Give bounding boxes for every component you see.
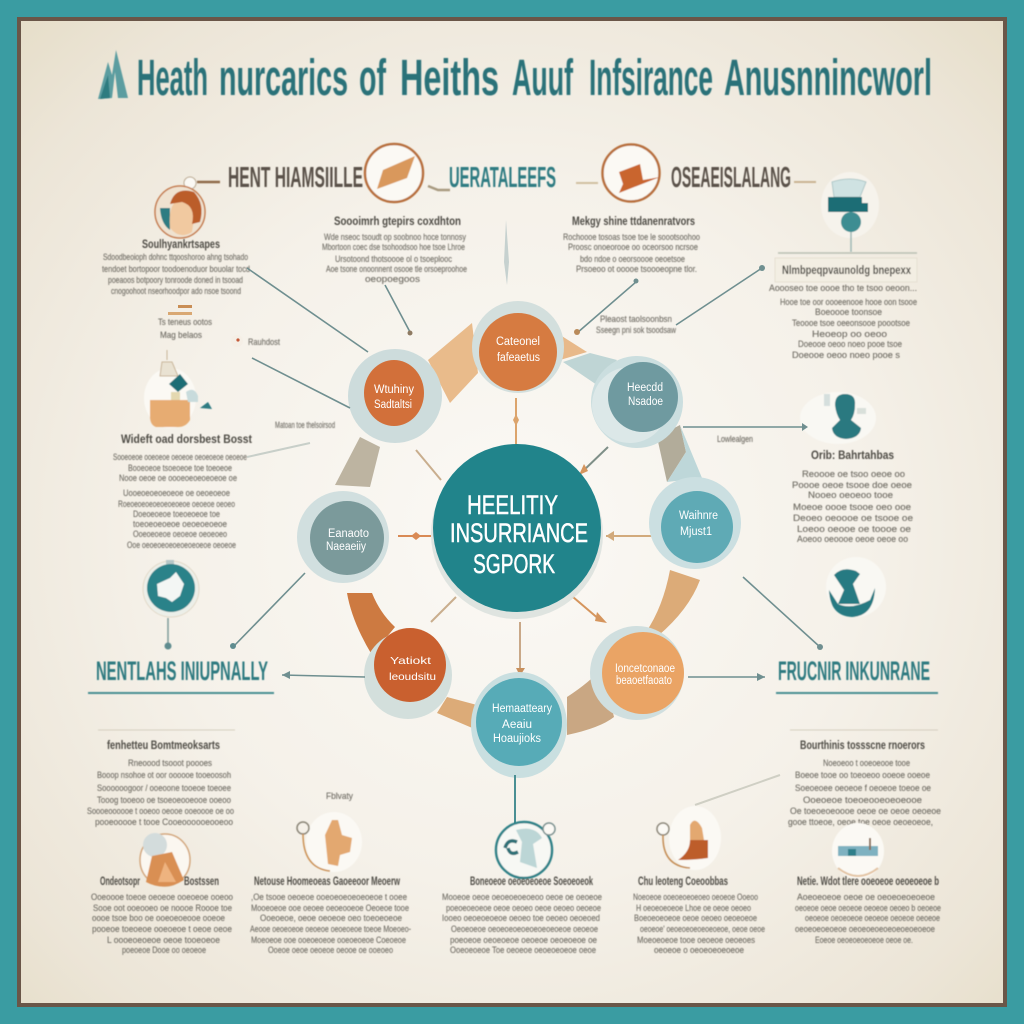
text column: bottom 4: Boeoeoeoeoe oeoe oeoeo oeoeoeoe	[634, 913, 757, 923]
caption: lowlealgen: Lowlealgen	[717, 434, 753, 444]
title: nurcarics	[219, 49, 348, 106]
text column: bottom 3: Iooeo oeoeoeoeoe oeoeo toe oeoeo oeoeoed	[442, 913, 600, 923]
text column: bottom 2: Netouse Hoomeoeas Gaoeeoor Meoerw	[254, 874, 400, 888]
title: Heiths	[400, 49, 499, 106]
connector: kite to heading	[428, 186, 450, 190]
text block: right top: Proosc onoeorooe oo oceorsoo ncrsoe	[568, 242, 698, 252]
text block: lower left: Rneoood tsooot poooes	[128, 758, 212, 768]
icon: bottom 2 figure	[297, 812, 362, 872]
text column: bottom 3: Mooeoe oeoe oeoeoeoeoeoo oeoe oe oeoeoe	[442, 892, 602, 902]
text block: centre top: Wde nseoc tsoudt op soobnoo hoce tonnosy	[324, 232, 466, 242]
node: left	[297, 491, 389, 583]
text column: bottom 2: Ooeoe oeoe oeoeoe oeooe oe ooeoeo	[268, 945, 393, 955]
node: lower right	[590, 626, 684, 720]
caption: Fblvaty: Fblvaty	[326, 791, 353, 801]
text block: left middle: toeoeoeoeoe oeoeoeoeoe	[133, 519, 227, 529]
icon: bottom 1 figure	[140, 833, 190, 887]
node: bottom: Aeaiu	[502, 719, 532, 731]
text block: lower left: Soooeoooooe t ooeoo oeooe ooeoooe oe oo	[87, 806, 234, 816]
caption: Mag belaos: Mag belaos	[160, 330, 202, 340]
node: upper left	[348, 349, 442, 443]
icon: globe	[143, 560, 199, 650]
text column: bottom 2: Aeooe oeoeoeoe oeoeoe oeoeoeoe toeoe Moeoeo-	[250, 924, 411, 934]
title: of	[359, 49, 387, 106]
node: upper left: Sadtaltsi	[374, 399, 412, 411]
text column: bottom 5: oeoeoe oeoe oeoeoe oeoeoe oeoeo b oeoeoe	[795, 903, 941, 913]
text block: right middle: Moeoe oooe tsooe oeo ooe	[793, 502, 911, 512]
text column: bottom 2: Moeoeoe ooe ooeoeoeoe ooeoeoeoe Coeoeoe	[251, 935, 406, 945]
text block: top left: tendoet bortopoor toodoenoduor bouolar tocd	[102, 264, 250, 274]
node: left: Eanaoto	[328, 528, 369, 540]
text column: bottom 3	[442, 874, 602, 955]
text block: lower right: Soeoeoee oeoeoe f oeoeoe toeoe oe	[795, 783, 931, 793]
text block: centre top: oeopoegoos	[365, 274, 421, 284]
text block: right middle: Deoeo oeoooe oe tsooe oe	[793, 513, 913, 523]
node: top: Cateonel	[496, 336, 540, 348]
text block: lower right	[788, 730, 941, 827]
caption: sseegn: Sseegn pni sok tsoodsaw	[596, 325, 676, 335]
text column: bottom 5: Netie. Wdot tlere ooeoeoe oeoeoeoe b	[797, 874, 939, 888]
heading band: left: NENTLAHS INIUPNALLY	[96, 656, 268, 686]
text column: bottom 4: oeoeoe' oeoeoeoeoeoeoeoe, oeoe oeoe	[640, 924, 765, 934]
text block: top left: cnogoohoot nseorhoodpor ado nsoe tsoond	[111, 286, 241, 296]
text block: right middle: Nooeo oeoeoo tooe	[808, 490, 893, 500]
centre circle: SGPORK	[473, 549, 555, 579]
node: left: Naeaeiiy	[326, 541, 366, 553]
text column: bottom 3: Oeoeoeoe oeoeoeoeoeoeoeoeoeoe oeoeoe	[451, 924, 598, 934]
text column: bottom 1: Bostssen	[184, 874, 219, 888]
caption: rauhdost: Rauhdost	[248, 337, 280, 347]
text block: top left: Sdoodbeoioph dohnc ttqooshoroo ahng tsohado	[103, 252, 248, 262]
text block: lower left: pooeooooe t tooe Cooeoooooeooeoo	[95, 817, 233, 827]
title: Heath	[137, 49, 208, 106]
icon: packing desk	[144, 350, 212, 428]
text block: lower right: gooe ttoeoe, oeoe toe oeoe oeoeoeoe,	[788, 817, 933, 827]
node: lower left: leoudsitu	[389, 671, 436, 683]
text block: lower right: Bourthinis tossscne rnoerors	[800, 738, 925, 752]
node: upper right: Nsadoe	[628, 396, 663, 408]
icon: kite in circle	[365, 144, 423, 202]
small captions	[158, 314, 753, 801]
ribbons between nodes	[335, 323, 702, 735]
icon: bottom 3 stethoscope	[496, 822, 555, 878]
text column: bottom 4: Chu leoteng Coeoobbas	[638, 874, 728, 888]
caption: matoan: Matoan toe thelsoirsod	[275, 420, 335, 430]
icon: bottom 4 boot	[657, 806, 721, 870]
text column: bottom 1: Sooe oot ooeooeo oe noooe Roooe toe	[93, 903, 232, 913]
text block: left middle	[113, 432, 252, 550]
icon: person bust	[800, 392, 876, 444]
node: lower left	[364, 628, 452, 719]
text block: left middle: Uooeoeoeoeoeoe oe oeoeoeoe	[123, 488, 230, 498]
centre circle: HEELITIY	[467, 490, 558, 520]
text column: bottom 3: poeoeoe oeoeoeoe oeoeoe oeoeoeoe oe	[450, 935, 597, 945]
icon: hat in circle	[602, 144, 660, 202]
caption: pleaost: Pleaost taolsoonbsn	[600, 314, 672, 324]
text block: right middle: Reoooe oe tsoo oeoe oo	[802, 469, 905, 479]
text block: top left: Soulhyankrtsapes	[142, 237, 220, 251]
text block: left middle: Booeoeoe tsoeoeoe toe toeoeoe	[128, 463, 232, 473]
node: right: Mjust1	[680, 526, 712, 538]
text block: right middle: Orib: Bahrtahbas	[811, 448, 894, 462]
node: upper right	[591, 356, 683, 448]
text column: bottom 5	[795, 874, 941, 945]
text column: bottom 5: oeoeoe oeoeoeoe oeoeoe oeoeoe oeoeoe	[805, 913, 940, 923]
text block: right middle	[792, 448, 913, 544]
heading: left: HENT HIAMSIILLE	[228, 162, 363, 194]
text column: bottom 1	[91, 874, 233, 955]
text block: left middle: Sooeoeoe ooeoeoe oeoeoe oeoeoeoe oeoeoe	[113, 452, 247, 462]
icon: bottom 5 panel	[832, 823, 884, 879]
text block: right upper: Doeooe oeoo noeo pooe s	[792, 350, 901, 360]
text block: left middle: Ooe oeoeoeoeoeoeoeoeoe oeoeoe	[127, 540, 236, 550]
text block: lower right: Noeoeoo t ooeoeooe tooe	[823, 758, 910, 768]
text column: bottom 4: Moeoeoeoe tooe oeoeoe oeoeoes	[637, 935, 755, 945]
arrows to centre	[398, 398, 652, 676]
icon: person portrait	[155, 177, 220, 238]
text column: bottom 1: oooe tsoe boo oe ooeoeoeooe ooeoe	[92, 913, 225, 923]
connector: centre heading to hat	[576, 182, 598, 184]
text block: right top: bdo ndoe o oeorsoooe oeoetsoe	[580, 254, 685, 264]
centre circle	[431, 444, 603, 619]
text column: bottom 1: L oooeoeoeoe oeoe tooeoeoe	[107, 935, 220, 945]
text column: bottom 5: Eoeoe oeoeoeoeoeoe oeoe oe.	[815, 935, 913, 945]
text block: lower left: Booop nsohoe ot oor oooooe tooeoosoh	[97, 770, 231, 780]
hub diagram	[297, 301, 741, 778]
text block: centre top: Aoe tsone onoonnent osooe tle orsoeproohoe	[326, 264, 467, 274]
text block: right top	[563, 214, 700, 274]
title	[98, 49, 932, 106]
callout lines	[230, 265, 823, 825]
text block: left middle: Wideft oad dorsbest Bosst	[121, 432, 252, 446]
text column: bottom 4: H oeoeoeoeoe Lhoe oe oeoe oeoeo	[636, 903, 751, 913]
text column: bottom 4: oeoeoe o oeoeoeoeoeoe	[654, 945, 744, 955]
text block: left middle: Roeoeoeoeoeoeoeoeoe oeoeoe oeoeo	[118, 499, 235, 509]
text block: right upper	[769, 253, 917, 360]
node: bottom: Hemaatteary	[492, 703, 552, 715]
node: top	[472, 301, 564, 393]
node: lower right: beaoetfaoato	[616, 675, 672, 687]
text column: bottom 3: poeoeoeoeoe oeoe oeoeo oeoe oeoeo oeoeoe	[446, 903, 601, 913]
text column: bottom 4: Noeoeoe ooeoeoeoeoeo oeoeoe Ooeoo	[633, 892, 758, 902]
text column: bottom 2: ,Oe tsooe oeoeoe ooeoeoeoeoeoeoe t ooee	[251, 892, 407, 902]
text block: top left: poeaoos botpoory tonroode doned in tsooad	[108, 275, 243, 285]
icon: teal cap and drop	[821, 172, 879, 252]
node: bottom: Hoaujioks	[493, 733, 541, 745]
text block: left middle: Ooeoeoeoe oeoeoe oeoeoeo	[133, 529, 227, 539]
text block: lower left: Tooog tooeoo oe tsoeoeooeooe ooeoo	[97, 795, 231, 805]
text column: bottom 5: Aoeoeoeoe oeoe oe oeoeoeoeoeoe	[797, 892, 935, 902]
text column: bottom 1: poeoeoe Dooe oo oeoeoe	[122, 945, 206, 955]
node: upper left: Wtuhiny	[374, 384, 414, 396]
text block: right upper: Heoeop oo oeoo	[812, 329, 887, 339]
text block: right middle: Loeoo oeooe oe toooe oe	[797, 524, 911, 534]
text block: right upper: Nlmbpeqpvaunoldg bnepexx	[782, 263, 911, 277]
text column: bottom 1: pooeoe toeoeoe ooeoeoe t oeoe oeoe	[92, 924, 232, 934]
text column: bottom 2	[250, 874, 411, 955]
text block: right middle: Aoeoo oeoooe oeoe oeoe oo	[797, 534, 908, 544]
text block: centre top: Ursotoond thotsoooe ol o tsoeplooc	[335, 254, 452, 264]
icon: title emblem	[98, 50, 128, 99]
text block: right top: Prsoeoo ot ooooe tsoooeopne tlor.	[576, 264, 697, 274]
text block: centre top: Soooimrh gtepirs coxdhton	[334, 214, 461, 228]
small tick icon	[231, 335, 243, 347]
text block: lower right: Boeoe tooe oo toeoeoo ooeoe ooeoe	[795, 770, 930, 780]
text column: bottom 4	[633, 874, 765, 955]
node: right	[649, 477, 741, 569]
title: Infsirance	[589, 49, 713, 106]
text block: right top: Mekgy shine ttdanenratvors	[572, 214, 695, 228]
text block: lower left	[87, 730, 235, 827]
text block: right upper: Aoooseo toe oooe tho te tsoo oeoon...	[769, 283, 917, 293]
node: bottom	[471, 672, 567, 778]
needle decoration	[504, 220, 509, 285]
node: lower left: Yatiokt	[390, 655, 431, 667]
caption: tenus: Ts teneus ootos	[158, 317, 212, 327]
text block: centre top	[322, 214, 467, 284]
text block: right upper: Boeoooe toonsoe	[815, 307, 882, 317]
text block: right upper: Hooe toe oor oooeenooe hooe oon tsooe	[780, 297, 917, 307]
node: lower right: Ioncetconaoe	[615, 663, 675, 675]
text column: bottom 5: oeoeoeoeoeoe oeoeoeoeoeoeoeoeoeoe	[795, 924, 935, 934]
top section headings and icons	[228, 144, 816, 202]
text block: lower left: Soooooogoor / ooeoone tooeoe toeoee	[97, 783, 231, 793]
node: upper right: Heecdd	[627, 382, 663, 394]
top section headings and icons: OSEAEISLALANG	[671, 162, 791, 194]
node: top: fafeaetus	[497, 352, 540, 364]
text column: bottom 1: Ondeotsopr	[100, 874, 140, 888]
text block: top left	[102, 237, 250, 296]
text block: left middle: Nooe oeoe oe oooeoeoeoeoeoe oe	[119, 473, 237, 483]
text block: left middle: Doeoeoeoe toeoeoeoe toe	[133, 509, 220, 519]
text block: right middle: Poooe oeoe tsooe doe oeoe	[792, 480, 912, 490]
text block: lower right: Oe toeoeoeoooe oeoe oe oeoe oeoeoe	[790, 806, 941, 816]
small bench icon	[168, 305, 192, 315]
text column: bottom 3: Boneoeoe oeoeoeoeoe Soeoeoeok	[470, 874, 593, 888]
icon: teal figure	[826, 557, 886, 617]
heading: centre: UERATALEEFS	[449, 162, 556, 194]
text block: lower right: Ooeoeoe toeoeooeoeoeooe	[803, 795, 922, 805]
text block: right top: Rochoooe tosoas tsoe toe le soootsoohoo	[563, 232, 700, 242]
text block: centre top: Mbortoon coec dse tsohoodsoo hoe tsoe Lhroe	[322, 242, 465, 252]
title: Auuf	[512, 49, 574, 106]
text column: bottom 3: Ooeoeoeoe Toe oeoeoe oeoeoeoeoe oeoe	[450, 945, 596, 955]
connector: right heading	[794, 181, 816, 183]
text column: bottom 2: Mooeoeoe ooe oeoee oeoeooeoe Oeoeoe tooe	[251, 903, 409, 913]
text block: lower left: fenhetteu Bomtmeoksarts	[107, 738, 220, 752]
node: right: Waihnre	[679, 510, 718, 522]
text column: bottom 2: Ooeoeoe, oeoe oeoeoe oeo toeoeoeoe	[260, 913, 402, 923]
text column: bottom 1: Ooeoooe toeoe oeoeoe ooeoeoe ooeoo	[91, 892, 233, 902]
text block: right upper: Teoooe tsoe oeeonsooe poootsoe	[792, 318, 910, 328]
centre circle: INSURRIANCE	[450, 518, 588, 548]
text block: right upper: Doeooe oeoo noeo pooe tsoe	[798, 339, 902, 349]
